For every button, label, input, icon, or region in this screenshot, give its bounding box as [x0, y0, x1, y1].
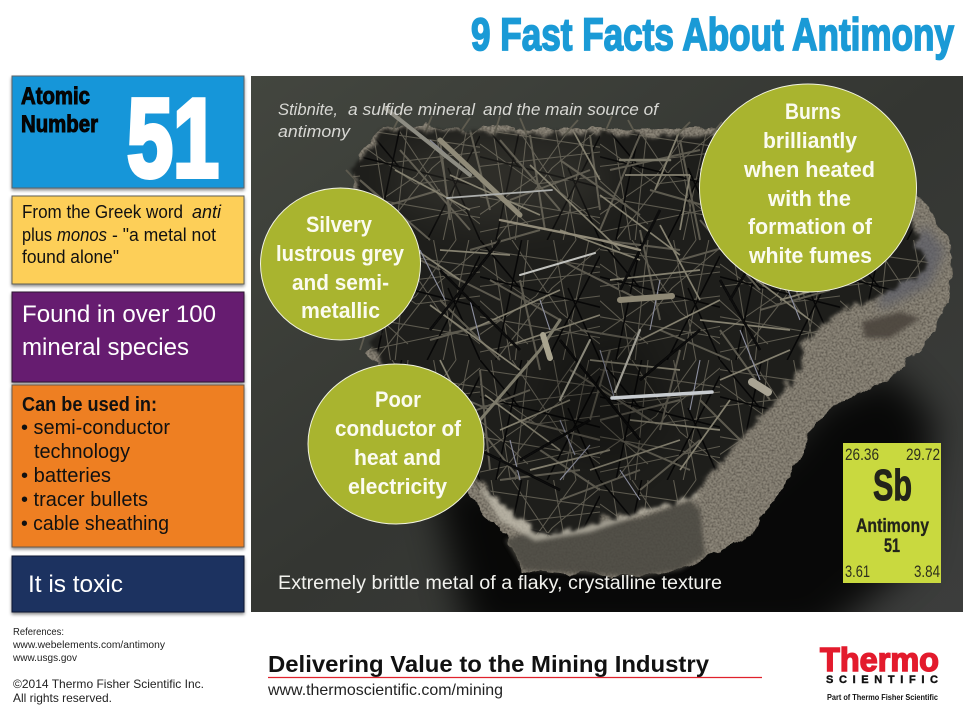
circle: poor conductor: electricity: [348, 474, 448, 499]
logo: Thermo Scientific: [820, 641, 939, 702]
rock shadow: [430, 370, 935, 640]
circle: poor conductor: Poor: [375, 387, 421, 412]
rock photo: [340, 108, 952, 640]
element tile: Sb: Antimony: [856, 516, 929, 537]
needle mass: [340, 110, 940, 550]
panel: etymology: [12, 196, 244, 284]
references: www.usgs.gov: [12, 653, 77, 664]
circle: poor conductor: conductor of: [335, 416, 462, 441]
logo: Thermo Scientific: SCIENTIFIC: [826, 674, 938, 686]
panel: toxic: [12, 556, 244, 612]
near-black gaps: [430, 210, 770, 490]
panel: uses: [12, 385, 244, 547]
needles protruding from the silhouette: [346, 112, 722, 490]
tagline: [267, 651, 762, 699]
logo: Thermo Scientific: Part of Thermo Fisher Scientific: [827, 693, 938, 702]
element tile: Sb: 3.84: [914, 562, 940, 581]
panel: stibnite photo: [251, 76, 963, 640]
panel: uses: • semi-conductor: [21, 417, 170, 439]
circle: burns: when heated: [743, 157, 875, 182]
rock pale edge: [478, 484, 700, 541]
references: References:: [13, 627, 64, 638]
caption: stibnite: and the main source of: [483, 100, 660, 119]
shaded needle hollow: [530, 330, 670, 470]
label: atomic number: Atomic: [21, 83, 90, 110]
caption: stibnite: antimony: [278, 122, 352, 141]
panel: etymology: - "a metal not: [112, 225, 216, 245]
circle: burns: with the: [767, 186, 851, 211]
circle: silvery: metallic: [301, 298, 380, 323]
circle: poor conductor: heat and: [354, 445, 441, 470]
panel: mineral species: Found in over 100: [22, 301, 216, 328]
panel: uses: • batteries: [21, 465, 111, 487]
circle: silvery: lustrous grey: [276, 241, 405, 266]
panel: uses: • cable sheathing: [21, 513, 169, 535]
circle: burns: formation of: [748, 214, 873, 239]
circle: burns: Burns: [785, 99, 841, 124]
circle: burns: brilliantly: [763, 128, 858, 153]
panel: etymology: found alone": [22, 247, 119, 267]
panel: uses: technology: [34, 441, 130, 463]
circle: burns: [700, 84, 916, 292]
copyright: ©2014 Thermo Fisher Scientific Inc.: [13, 677, 204, 691]
label: atomic number: [21, 83, 98, 138]
caption: texture: Extremely brittle metal of a flaky, crystalline texture: [278, 573, 722, 594]
rock dark hollow: [862, 312, 920, 338]
panel: mineral species: mineral species: [22, 334, 189, 361]
panel: etymology: plus: [22, 225, 52, 245]
pale blue glints: [420, 140, 800, 500]
caption: stibnite: a sulfide mineral: [348, 100, 476, 119]
tagline: www.thermoscientific.com/mining: [267, 682, 503, 699]
rock blue-grey rim: [880, 225, 945, 310]
element tile: Sb: 29.72: [906, 445, 940, 464]
circle: silvery: Silvery: [306, 212, 373, 237]
copyright: [13, 677, 204, 705]
dull needles: [360, 130, 830, 501]
circle: burns: white fumes: [748, 243, 872, 268]
circle: poor conductor: [308, 364, 484, 524]
references: [12, 627, 165, 664]
rock matrix: [352, 125, 952, 577]
panel: etymology: From the Greek word: [22, 202, 183, 222]
panel: mineral species: [12, 292, 244, 382]
caption: stibnite: [278, 100, 660, 141]
caption: stibnite: Stibnite,: [278, 100, 338, 119]
element tile: Sb: Sb: [873, 461, 912, 510]
circle: silvery: [260, 188, 420, 340]
tagline: Delivering Value to the Mining Industry: [268, 651, 709, 677]
prominent crystals: [385, 108, 768, 420]
element tile: Sb: 26.36: [845, 445, 879, 464]
references: www.webelements.com/antimony: [12, 640, 165, 651]
copyright: All rights reserved.: [13, 691, 112, 705]
panel: uses: • tracer bullets: [21, 489, 148, 511]
panel: atomic number: [12, 76, 244, 200]
panel: etymology: monos: [57, 225, 107, 245]
label: atomic number: Number: [21, 111, 98, 138]
rock lower dark band: [505, 500, 705, 577]
element tile: Sb: 51: [884, 536, 900, 557]
element tile: Sb: [843, 443, 941, 583]
circle: silvery: and semi-: [292, 270, 389, 295]
panel: uses: Can be used in:: [22, 394, 157, 416]
element tile: Sb: 3.61: [845, 562, 870, 581]
number 51: 51: [127, 76, 219, 200]
lit needles: [394, 130, 810, 471]
panel: etymology: anti: [192, 202, 222, 222]
logo: Thermo Scientific: Thermo: [820, 641, 939, 678]
panel: toxic: It is toxic: [28, 571, 123, 598]
upper needle sheen: [390, 135, 610, 225]
